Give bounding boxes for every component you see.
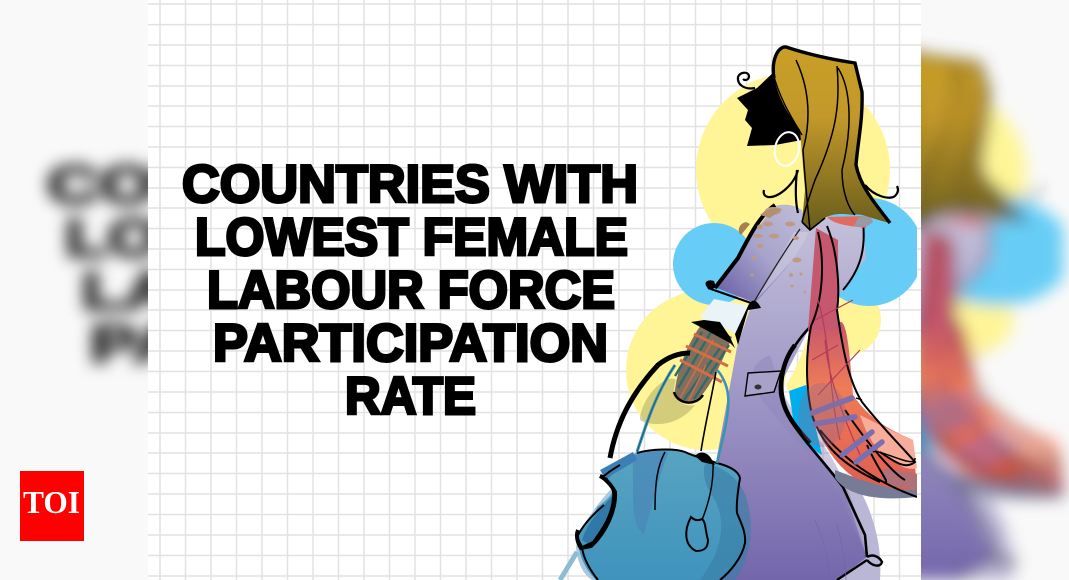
title: LOWEST FEMALE [195, 208, 628, 267]
scarf [798, 216, 917, 498]
title: RATE [345, 367, 476, 426]
pocket [745, 371, 781, 396]
blurred backdrop: PARTICIPATION [90, 314, 636, 374]
title: LABOUR FORCE [207, 261, 615, 320]
blurred backdrop: COUNTRIES WITH [47, 155, 678, 215]
hair [773, 47, 890, 230]
TOI logo [20, 471, 84, 541]
panel: graph paper [148, 0, 921, 580]
face silhouette [737, 71, 805, 146]
TOI logo: TOI [23, 484, 80, 520]
cuff [691, 299, 761, 348]
plaid forearm [674, 322, 732, 403]
hair curls [738, 73, 898, 213]
background circles [626, 73, 923, 450]
title: COUNTRIES WITH [182, 155, 638, 214]
illustration: woman with handbag [560, 47, 923, 580]
title: PARTICIPATION [213, 314, 608, 373]
blurred backdrop: LABOUR FORCE [82, 261, 646, 321]
blurred backdrop: LOWEST FEMALE [65, 208, 664, 268]
handbag [560, 353, 751, 580]
title [182, 155, 638, 426]
earring [774, 131, 800, 167]
dress [700, 215, 882, 580]
sleeve [706, 205, 808, 304]
arm shadow [640, 379, 695, 424]
